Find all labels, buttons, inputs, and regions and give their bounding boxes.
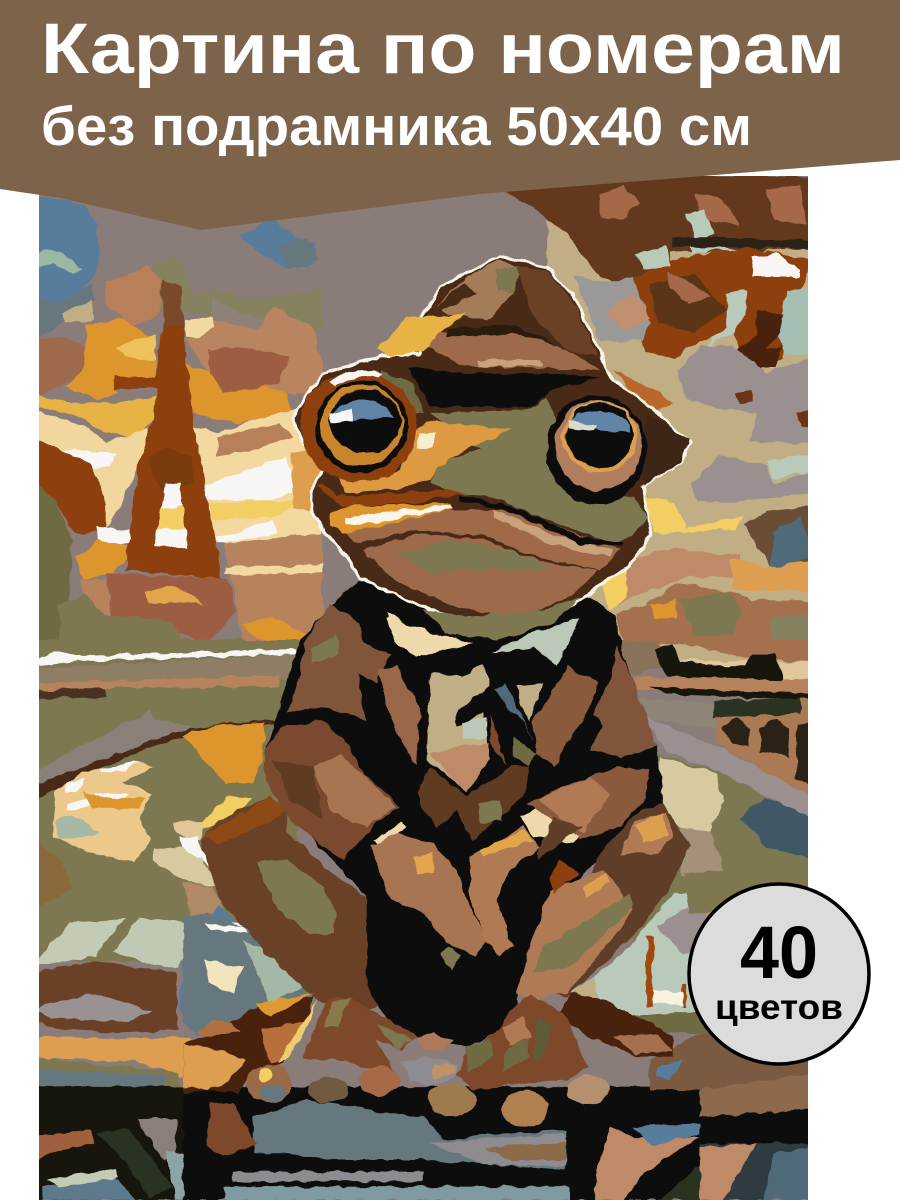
frog hands	[370, 827, 540, 970]
painting: frog in Paris	[20, 170, 830, 1200]
painting lower left: embankment, river, boats	[32, 640, 299, 1200]
badge circle	[689, 884, 869, 1064]
right eye	[547, 395, 647, 505]
painting right side: autumn leaves, clouds, castle and bridge	[506, 176, 808, 943]
frog feet and toes	[183, 993, 610, 1127]
frog dark torso	[267, 580, 663, 1047]
frog right leg	[517, 803, 690, 1057]
hat	[377, 260, 690, 487]
banner shape	[0, 0, 900, 230]
shadow under hat	[407, 367, 600, 408]
frog face	[317, 370, 647, 640]
title: Картина по номерам	[41, 10, 845, 89]
frog left leg and thigh	[200, 796, 378, 1010]
subtitle: без подрамника 50х40 см	[41, 95, 752, 157]
icon: Eiffel tower	[114, 280, 222, 580]
painting bottom centre: railing and water	[183, 863, 810, 1200]
badge: 40 colours	[689, 884, 869, 1064]
badge number: 40	[740, 911, 818, 994]
frog collar shadow	[360, 598, 594, 666]
left eye	[300, 371, 417, 482]
banner: brown header	[0, 0, 900, 230]
head outline	[293, 257, 692, 627]
badge label: цветов	[715, 988, 843, 1027]
frog head and hat	[293, 257, 692, 640]
painting left side: sky and clouds	[32, 195, 322, 663]
frog jacket	[265, 603, 657, 860]
